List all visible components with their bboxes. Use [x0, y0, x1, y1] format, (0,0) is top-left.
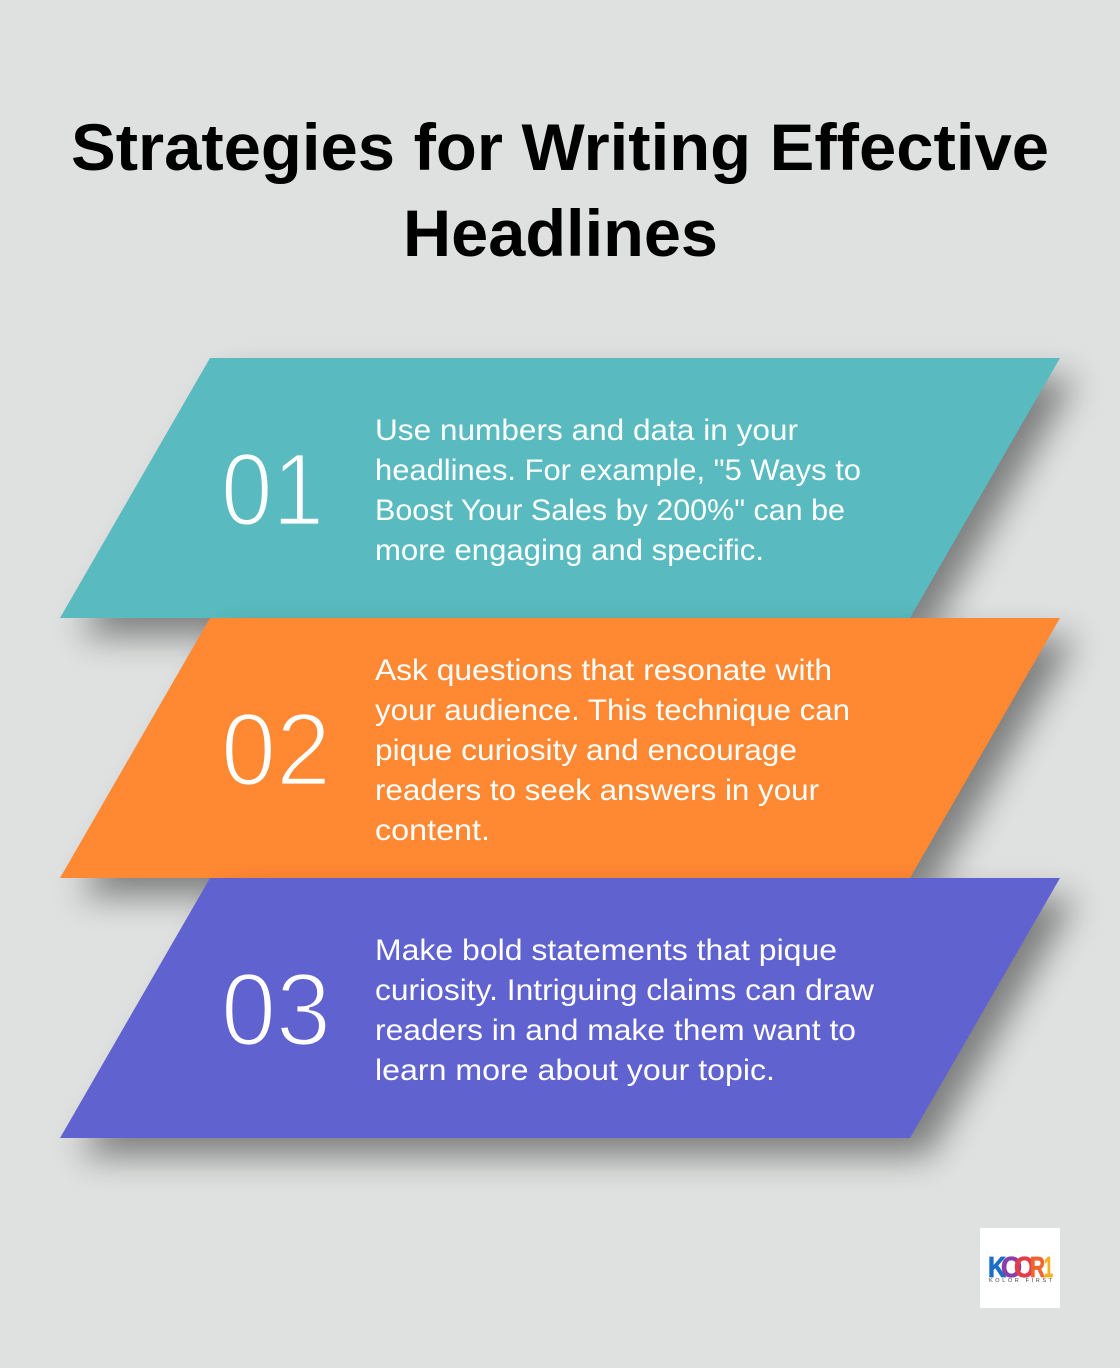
step 03 description: learn more about your topic. [375, 1054, 775, 1087]
step 02 description: content. [375, 814, 490, 847]
step 01 description: headlines. For example, "5 Ways to [375, 454, 861, 487]
logo: Koor1 Kolor First: K [988, 1252, 1006, 1284]
step 03 description [375, 934, 874, 1087]
logo: Koor1 Kolor First: 1 [1044, 1252, 1053, 1284]
step 03 description: curiosity. Intriguing claims can draw [375, 974, 874, 1007]
step 01 description: Use numbers and data in your [375, 414, 798, 447]
step 02 description: your audience. This technique can [375, 694, 850, 727]
logo: Koor1 Kolor First: O [1014, 1252, 1035, 1284]
panel: step 02 [60, 618, 1076, 896]
title: Strategies for Writing Effective [71, 110, 1049, 184]
step 03 description: readers in and make them want to [375, 1014, 856, 1047]
title [71, 110, 1049, 270]
logo: Koor1 Kolor First: R [1030, 1252, 1045, 1284]
step 02 description: pique curiosity and encourage [375, 734, 797, 767]
step 01 description [375, 414, 861, 567]
step 03 description: Make bold statements that pique [375, 934, 837, 967]
panel: step 03 [60, 878, 1076, 1156]
step 02 description: Ask questions that resonate with [375, 654, 832, 687]
title: Headlines [403, 196, 718, 270]
step 01 description: more engaging and specific. [375, 534, 764, 567]
step 02 number: 02 [221, 692, 331, 807]
logo: Koor1 Kolor First: O [1001, 1252, 1022, 1284]
logo: Koor1 Kolor First [980, 1228, 1060, 1308]
step 01 number: 01 [221, 432, 324, 547]
step 03 number: 03 [221, 952, 331, 1067]
panel: step 01 [60, 358, 1076, 636]
step 02 description: readers to seek answers in your [375, 774, 819, 807]
logo: Koor1 Kolor First: KOLOR FIRST [989, 1278, 1053, 1284]
step 01 description: Boost Your Sales by 200%" can be [375, 494, 845, 527]
step 02 description [375, 654, 850, 847]
